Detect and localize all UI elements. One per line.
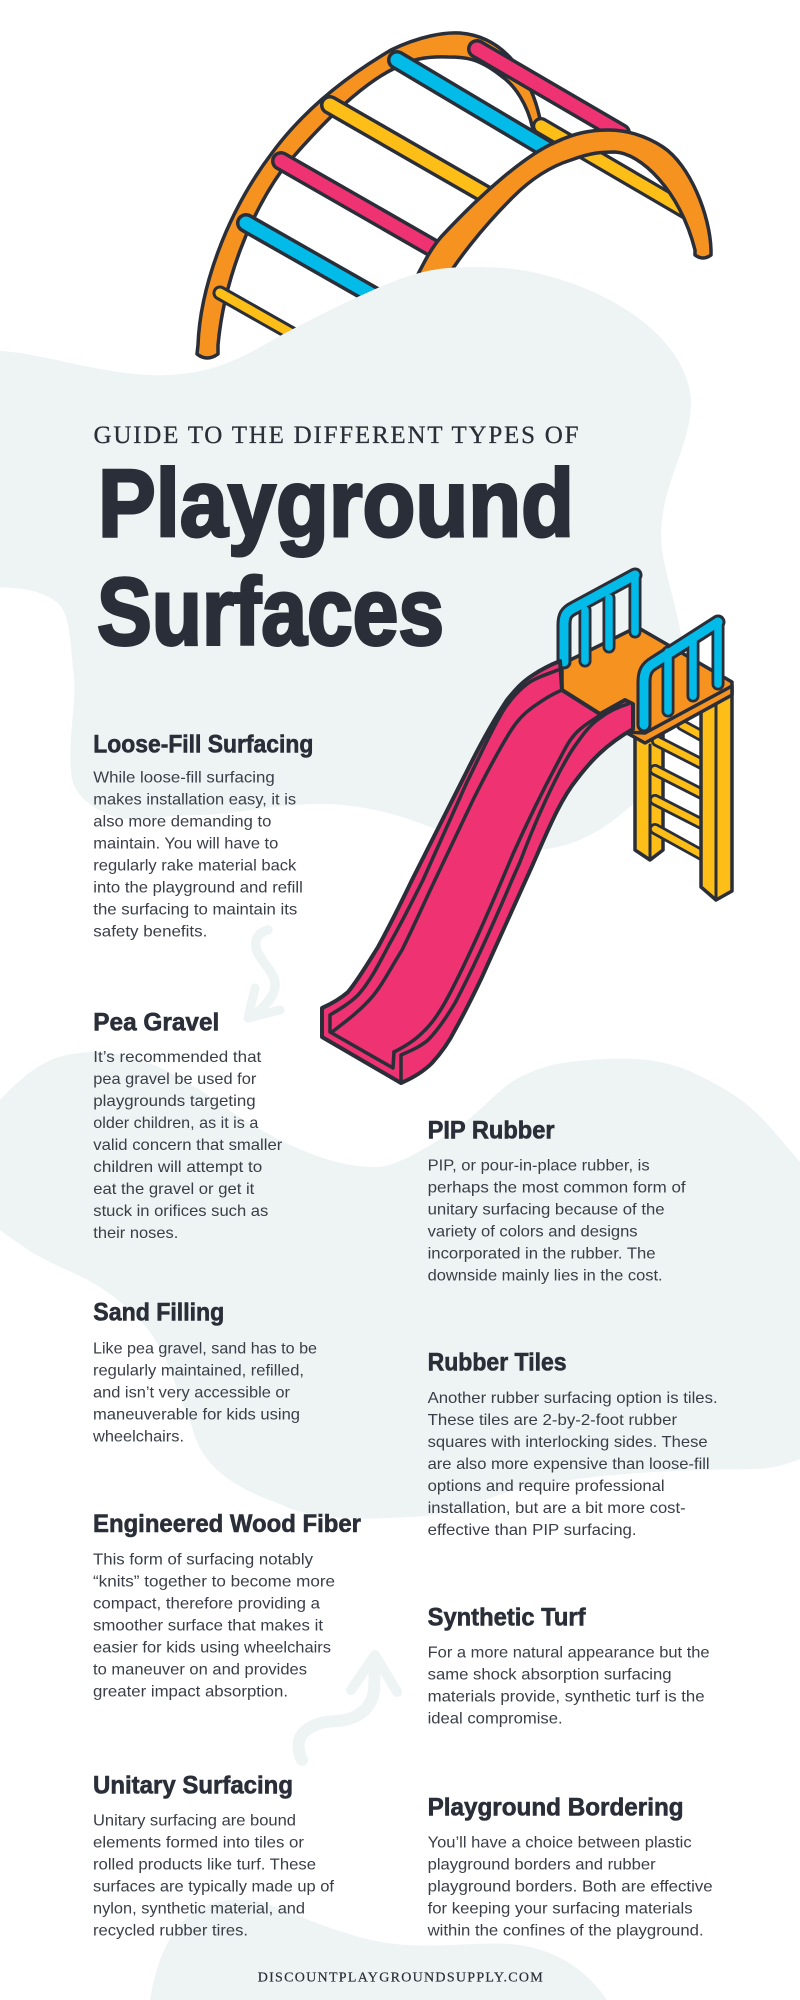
section: Engineered Wood Fiber [93, 1510, 361, 1700]
subtitle: GUIDE TO THE DIFFERENT TYPES OF [94, 422, 578, 449]
body text: are also more expensive than loose-fill [428, 1456, 710, 1473]
body text: Another rubber surfacing option is tiles. [428, 1390, 718, 1407]
body text: effective than PIP surfacing. [428, 1522, 637, 1539]
body text: compact, therefore providing a [93, 1595, 320, 1612]
section: Sand Filling [92, 1298, 317, 1445]
body text [427, 1834, 713, 1939]
heading: PIP Rubber [428, 1116, 555, 1144]
body text: children will attempt to [93, 1159, 262, 1176]
body text: older children, as it is a [93, 1115, 258, 1132]
body text: pea gravel be used for [93, 1071, 257, 1088]
body text: For a more natural appearance but the [428, 1644, 710, 1661]
arrow: down squiggle [248, 930, 280, 1018]
body text: the surfacing to maintain its [93, 901, 297, 918]
section: Unitary Surfacing [93, 1771, 335, 1939]
section: Loose-Fill Surfacing [93, 730, 313, 940]
ladder leg: left [635, 728, 663, 860]
body text: makes installation easy, it is [93, 791, 296, 808]
platform [562, 627, 732, 739]
body text: variety of colors and designs [428, 1223, 638, 1240]
body text: wheelchairs. [92, 1428, 184, 1445]
body text: surfaces are typically made up of [93, 1878, 335, 1895]
body text: options and require professional [428, 1478, 665, 1495]
heading: Pea Gravel [93, 1008, 219, 1036]
heading: Rubber Tiles [428, 1348, 567, 1376]
slide chute [322, 661, 633, 1083]
section: Pea Gravel [93, 1008, 283, 1242]
body text [93, 1551, 335, 1700]
body text: greater impact absorption. [93, 1683, 288, 1700]
section: Rubber Tiles [428, 1348, 718, 1539]
background blob: top [0, 267, 691, 849]
body text: and isn’t very accessible or [93, 1384, 291, 1401]
body text: stuck in orifices such as [93, 1203, 268, 1220]
ladder backing [663, 716, 700, 868]
body text: unitary surfacing because of the [428, 1201, 665, 1218]
platform front edge [625, 686, 732, 743]
body text: eat the gravel or get it [93, 1181, 255, 1198]
ladder leg: right [701, 691, 732, 900]
body text: materials provide, synthetic turf is the [428, 1688, 705, 1705]
title: Surfaces [97, 558, 444, 666]
background blob: middle [0, 1052, 800, 1519]
body text: Like pea gravel, sand has to be [93, 1340, 317, 1357]
heading: Playground Bordering [428, 1793, 684, 1821]
section: Playground Bordering [427, 1793, 713, 1939]
body text: ideal compromise. [428, 1710, 563, 1727]
front rail [644, 622, 718, 725]
body text [428, 1157, 686, 1284]
body text: regularly maintained, refilled, [93, 1362, 304, 1379]
heading: Synthetic Turf [428, 1603, 586, 1631]
body text: “knits” together to become more [93, 1573, 335, 1590]
body text: Unitary surfacing are bound [93, 1812, 296, 1829]
footer source: DISCOUNTPLAYGROUNDSUPPLY.COM [258, 1970, 543, 1986]
body text: for keeping your surfacing materials [428, 1900, 693, 1917]
body text: While loose-fill surfacing [93, 769, 275, 786]
body text: PIP, or pour-in-place rubber, is [428, 1157, 650, 1174]
body text: downside mainly lies in the cost. [428, 1267, 663, 1284]
body text: perhaps the most common form of [428, 1179, 686, 1196]
body text [93, 1812, 335, 1939]
body text: You’ll have a choice between plastic [428, 1834, 692, 1851]
body text: recycled rubber tires. [93, 1922, 248, 1939]
body text [428, 1390, 718, 1539]
body text: into the playground and refill [93, 879, 303, 896]
body text: nylon, synthetic material, and [93, 1900, 305, 1917]
body text: elements formed into tiles or [93, 1834, 305, 1851]
section: PIP Rubber [428, 1116, 686, 1284]
body text: maneuverable for kids using [93, 1406, 300, 1423]
body text: smoother surface that makes it [93, 1617, 324, 1634]
body text: playgrounds targeting [93, 1093, 256, 1110]
body text: incorporated in the rubber. The [428, 1245, 656, 1262]
body text: within the confines of the playground. [427, 1922, 704, 1939]
section: Synthetic Turf [428, 1603, 710, 1727]
heading: Loose-Fill Surfacing [93, 730, 313, 758]
body text [92, 1340, 317, 1445]
body text: maintain. You will have to [93, 835, 278, 852]
illustration: slide [322, 575, 732, 1083]
body text: also more demanding to [93, 813, 271, 830]
body text: valid concern that smaller [93, 1137, 283, 1154]
body text: installation, but are a bit more cost- [428, 1500, 686, 1517]
body text: playground borders and rubber [428, 1856, 656, 1873]
body text: playground borders. Both are effective [428, 1878, 713, 1895]
background blob: bottom [150, 1900, 607, 2000]
illustration: monkey bar arch [197, 33, 711, 358]
body text: squares with interlocking sides. These [428, 1434, 708, 1451]
body text [93, 1049, 283, 1242]
body text [428, 1644, 710, 1727]
body text [93, 769, 303, 940]
heading: Engineered Wood Fiber [93, 1510, 361, 1538]
body text: easier for kids using wheelchairs [93, 1639, 331, 1656]
heading: Unitary Surfacing [93, 1771, 293, 1799]
body text: same shock absorption surfacing [428, 1666, 672, 1683]
body text: regularly rake material back [93, 857, 297, 874]
heading: Sand Filling [93, 1298, 224, 1326]
title [97, 450, 574, 666]
back rail [564, 575, 635, 662]
body text: rolled products like turf. These [93, 1856, 316, 1873]
body text: This form of surfacing notably [93, 1551, 313, 1568]
body text: to maneuver on and provides [93, 1661, 307, 1678]
body text: These tiles are 2-by-2-foot rubber [428, 1412, 678, 1429]
body text: It’s recommended that [93, 1049, 262, 1066]
body text: safety benefits. [93, 923, 207, 940]
ladder rungs [655, 725, 702, 855]
body text: their noses. [93, 1225, 178, 1242]
title: Playground [98, 450, 574, 557]
arrow: up squiggle [298, 1655, 397, 1760]
